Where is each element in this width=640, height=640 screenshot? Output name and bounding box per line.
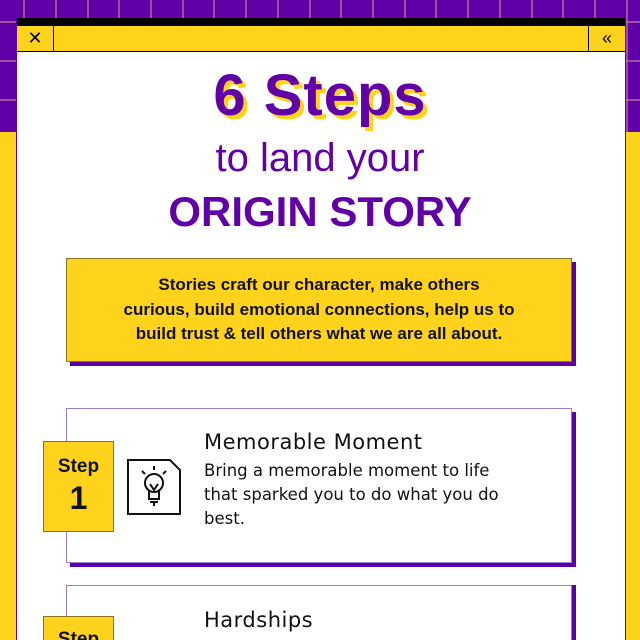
intro callout: curious, build emotional connections, help us to xyxy=(123,300,515,318)
step 1 text: Bring a memorable moment to life xyxy=(204,461,489,480)
intro callout: build trust & tell others what we are all about. xyxy=(136,324,502,343)
panel: step 1 xyxy=(66,408,572,563)
step 1 heading: Memorable Moment xyxy=(204,430,422,454)
step 1 text: best. xyxy=(204,509,245,528)
step 1 badge: Step xyxy=(58,456,99,477)
step 1 text: that sparked you to do what you do xyxy=(204,485,499,504)
title: 6 Steps xyxy=(213,63,427,128)
icon: lightbulb xyxy=(127,459,181,515)
close icon xyxy=(17,26,54,51)
step 1 badge: 1 xyxy=(70,480,87,516)
background grid xyxy=(0,0,640,132)
step 2 badge xyxy=(43,616,114,640)
collapse icon: « xyxy=(602,28,612,48)
step 2 heading: Hardships xyxy=(204,608,313,632)
panel: step 2 xyxy=(66,585,572,640)
step 1 badge xyxy=(43,441,114,532)
subtitle bold: ORIGIN STORY xyxy=(168,188,472,235)
intro callout: Stories craft our character, make others xyxy=(158,275,480,294)
close icon: ✕ xyxy=(27,28,43,48)
window title bar xyxy=(17,18,625,26)
subtitle: to land your xyxy=(215,136,425,180)
step 1 text xyxy=(204,461,499,528)
intro callout xyxy=(66,258,572,362)
collapse icon xyxy=(588,26,625,51)
